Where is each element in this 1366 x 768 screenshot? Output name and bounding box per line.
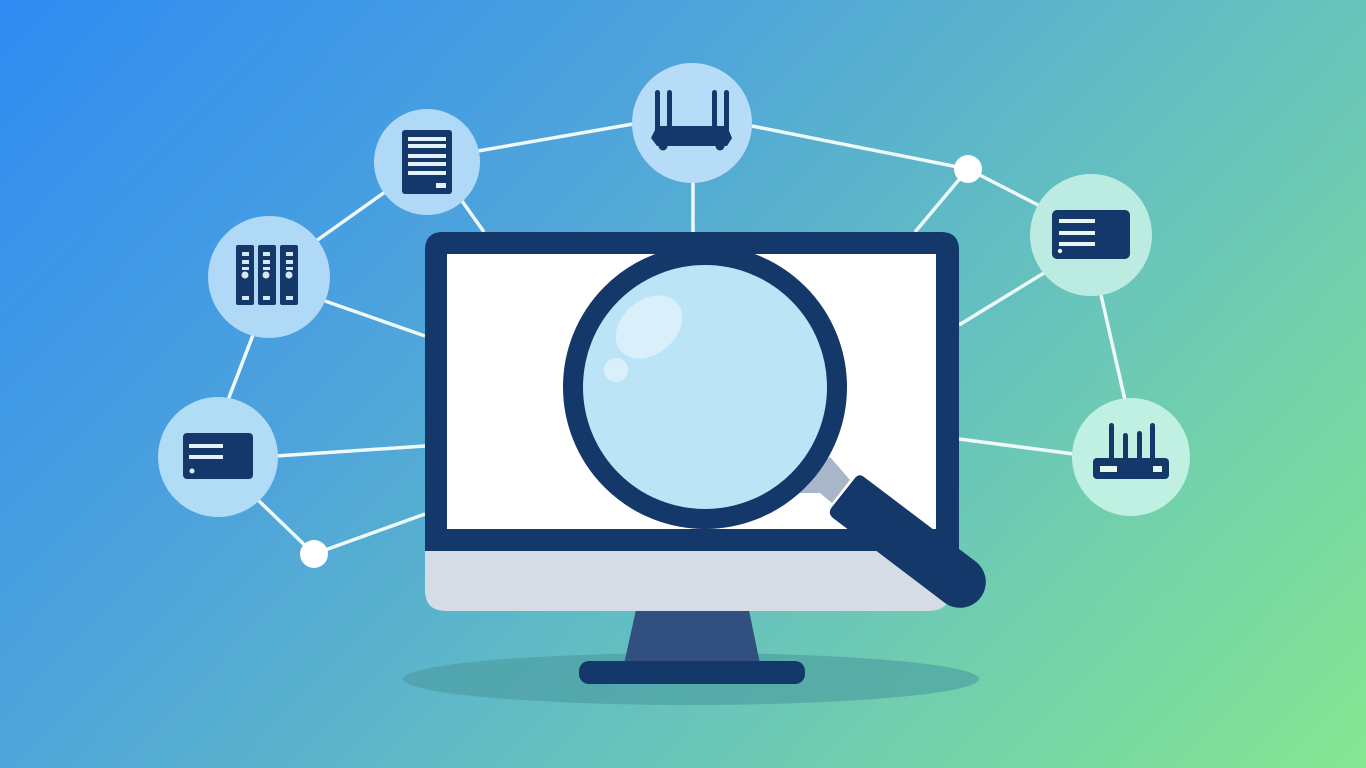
junction node: upper right — [954, 155, 982, 183]
node: router right — [1072, 398, 1190, 516]
node: card left — [158, 397, 278, 517]
node: router top — [632, 63, 752, 183]
magnifying glass — [573, 255, 986, 608]
monitor stand — [579, 610, 805, 684]
node: document server — [374, 109, 480, 215]
monitor shadow — [403, 653, 979, 705]
junction node: lower left — [300, 540, 328, 568]
node: card right — [1030, 174, 1152, 296]
network connection lines — [228, 124, 1125, 554]
monitor — [425, 232, 959, 611]
node: server racks — [208, 216, 330, 338]
